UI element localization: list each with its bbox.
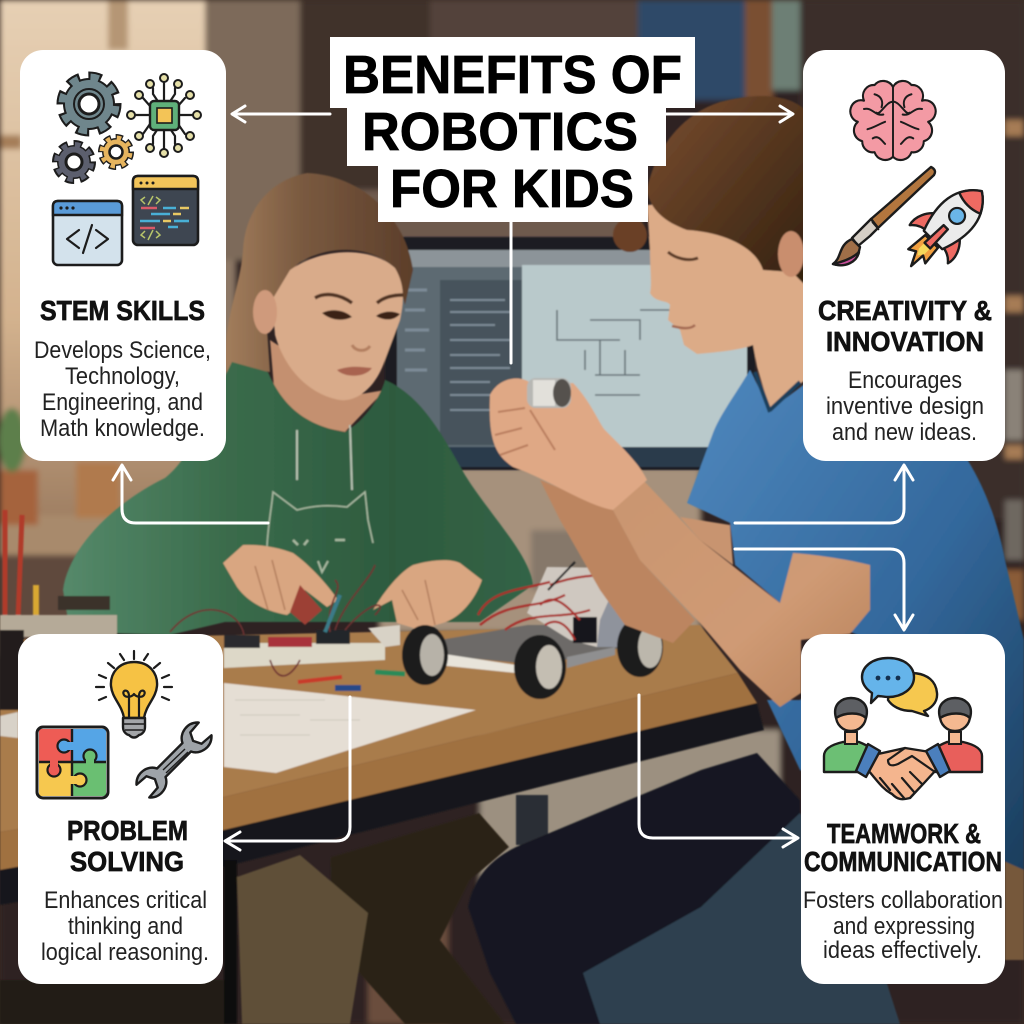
heading: teamwork and communication: TEAMWORK &: [827, 818, 981, 849]
icon: circuit chip: [127, 74, 201, 157]
description: teamwork and communication: and expressing: [833, 913, 975, 940]
description: problem solving: logical reasoning.: [41, 939, 209, 966]
description: STEM skills: Math knowledge.: [40, 415, 205, 442]
boy shirt: [687, 370, 1024, 870]
pens at the left: [5, 510, 22, 620]
description: STEM skills: Technology,: [65, 363, 180, 390]
arrow: title to STEM skills: [232, 106, 330, 122]
panel: creativity and innovation: [803, 50, 1005, 461]
heading: teamwork and communication: [804, 818, 1002, 877]
girl face: [272, 252, 403, 400]
girl hair: [225, 173, 413, 372]
description: STEM skills: [34, 337, 211, 442]
description: creativity and innovation: Encourages: [848, 367, 962, 394]
heading: problem solving: PROBLEM: [67, 815, 188, 846]
icon: dark gear: [57, 145, 91, 179]
icon: wrench: [133, 719, 215, 801]
icon: puzzle: [37, 727, 108, 798]
heading: problem solving: [67, 815, 188, 877]
description: STEM skills: Develops Science,: [34, 337, 211, 364]
panel: STEM skills: [20, 50, 226, 461]
icon: left person: [824, 698, 870, 772]
heading: creativity and innovation: [818, 295, 992, 357]
icon: large gear: [63, 78, 115, 130]
description: creativity and innovation: and new ideas.: [832, 419, 977, 446]
heading: STEM skills: STEM SKILLS: [40, 295, 205, 326]
title: [330, 37, 695, 222]
description: creativity and innovation: inventive design: [826, 393, 984, 420]
heading: creativity and innovation: INNOVATION: [826, 326, 984, 357]
icon: speech bubbles: [862, 658, 937, 716]
description: teamwork and communication: Fosters collaboration: [803, 887, 1003, 914]
icon: light bulb: [96, 651, 172, 738]
arrow: car to teamwork: [639, 695, 798, 847]
girl neck: [270, 340, 385, 432]
heading: problem solving: SOLVING: [70, 846, 184, 877]
icon: handshake: [856, 744, 950, 799]
description: STEM skills: Engineering, and: [42, 389, 203, 416]
table: [0, 625, 764, 1024]
icon: paint brush: [833, 167, 935, 265]
line: title down to the motor: [510, 222, 512, 363]
title: BENEFITS OF: [343, 45, 682, 105]
arrow: boy to teamwork: [735, 549, 913, 630]
robot car: [402, 562, 663, 699]
description: teamwork and communication: [803, 887, 1003, 964]
motor: [527, 378, 571, 408]
panel: problem solving: [18, 634, 223, 984]
arrow: boy to creativity: [735, 465, 913, 523]
icon: yellow gear: [102, 138, 130, 166]
description: problem solving: thinking and: [68, 913, 183, 940]
panel: teamwork and communication: [801, 634, 1005, 984]
arrow: table to problem solving: [225, 697, 350, 850]
boy far arm: [540, 480, 695, 643]
icon: brain: [850, 81, 936, 160]
title: FOR KIDS: [390, 159, 634, 219]
monitor: [385, 237, 755, 470]
girl hands: [223, 545, 338, 615]
girl hoodie: [63, 362, 533, 635]
icon: dark code editor: [133, 176, 198, 245]
arrow: girl to STEM skills: [113, 465, 268, 523]
paper: [224, 683, 476, 773]
description: teamwork and communication: ideas effectively.: [823, 937, 982, 964]
description: creativity and innovation: [826, 367, 984, 446]
description: problem solving: Enhances critical: [44, 887, 207, 914]
icon: code window: [53, 201, 122, 265]
breadboard and parts: [224, 643, 385, 668]
boy jeans: [468, 753, 800, 1024]
boy head: [647, 200, 805, 410]
icon: rocket: [889, 172, 1001, 284]
boy hands holding motor: [490, 378, 647, 510]
arrow: title to creativity: [666, 106, 793, 122]
girl trousers: [330, 813, 509, 1024]
icon: right person: [936, 698, 982, 772]
heading: creativity and innovation: CREATIVITY &: [818, 295, 992, 326]
description: problem solving: [41, 887, 209, 966]
boy near arm: [613, 480, 870, 707]
title: ROBOTICS: [362, 102, 638, 162]
